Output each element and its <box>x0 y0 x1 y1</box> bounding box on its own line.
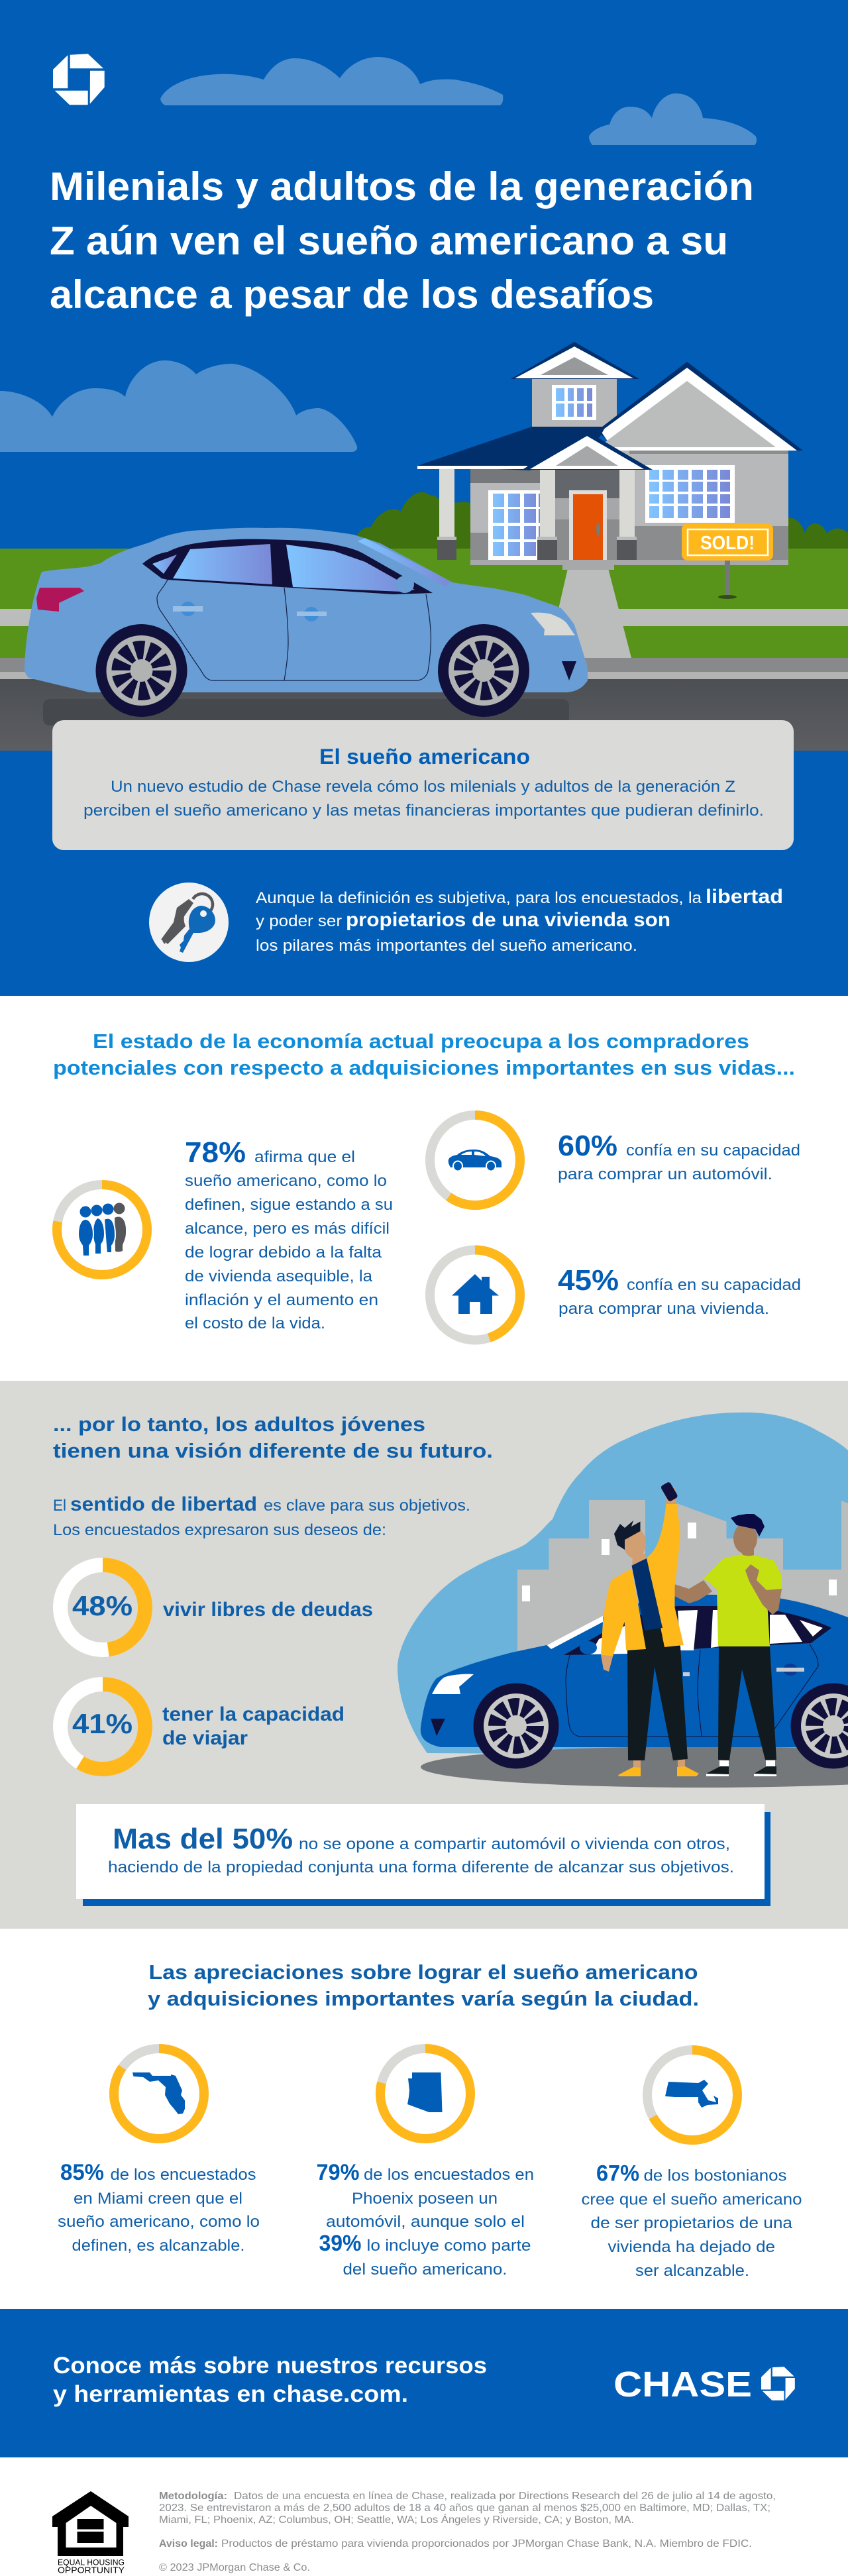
text: Miami: sueño americano, como lo <box>58 2213 260 2231</box>
stat: 60%: 60% <box>558 1130 617 1162</box>
icon: Arizona <box>407 2072 443 2112</box>
ring: 41% <box>60 1684 145 1769</box>
person: friend in lime shirt <box>674 1514 782 1776</box>
stat: 45%: confía en su capacidad <box>627 1276 801 1294</box>
door lines <box>566 1644 818 1737</box>
stat: 78%: afirma que el <box>254 1148 355 1166</box>
taillight <box>36 588 84 612</box>
door handles <box>683 1664 804 1676</box>
stat: 78%: 78% <box>185 1136 246 1169</box>
callout text <box>108 1835 734 1876</box>
cloud: top right <box>589 93 757 145</box>
cta text <box>53 2353 487 2407</box>
cloud: top middle <box>160 57 503 105</box>
text: copyright: © 2023 JPMorgan Chase & Co. <box>159 2562 310 2573</box>
stat: 78%: de lograr debido a la falta <box>185 1244 382 1261</box>
main roof <box>417 427 606 470</box>
ring: 45% <box>430 1250 520 1340</box>
bumper vent <box>562 661 576 680</box>
callout text: no se opone a compartir automóvil o vivienda con otros, <box>299 1835 730 1853</box>
cta text: Conoce más sobre nuestros recursos <box>53 2353 487 2379</box>
icon: Chase logo <box>53 54 105 105</box>
car window frame <box>142 539 433 594</box>
text: Boston: ser alcanzable. <box>635 2262 749 2280</box>
heading: Las apreciaciones sobre lograr el sueño americano <box>148 1960 698 1984</box>
stat: 78%: alcance, pero es más difícil <box>185 1220 390 1238</box>
title: Milenials y adultos de la generación <box>50 164 754 209</box>
ground <box>421 1746 848 1788</box>
ring: Phoenix 79% <box>380 2049 470 2139</box>
headlight <box>432 1674 474 1694</box>
text: freedom and ownership: Aunque la definición es subjetiva, para los encuestados, la <box>256 889 702 907</box>
front wheel <box>438 624 529 717</box>
main gable <box>596 362 803 451</box>
text: Boston <box>582 2161 802 2280</box>
text: methodology: Datos de una encuesta en línea de Chase, realizada por Directions Research del 26 de julio al 14 de agosto, <box>234 2491 776 2502</box>
icon: Massachusetts <box>665 2080 718 2108</box>
city buildings <box>517 1500 848 1653</box>
bumper vent <box>431 1719 445 1736</box>
panel: economy <box>0 996 848 1381</box>
text: Miami <box>58 2160 260 2255</box>
text: legal notice: Productos de préstamo para vivienda proporcionados por JPMorgan Chase Bank, N.A. Miembro de FDIC. <box>221 2538 752 2549</box>
panel: footer <box>0 2457 848 2576</box>
text: freedom and ownership: libertad <box>706 886 783 908</box>
text: Boston: cree que el sueño americano <box>582 2190 802 2209</box>
door <box>569 490 607 560</box>
text: Miami: de los encuestados <box>110 2166 256 2184</box>
text: Boston: vivienda ha dejado de <box>608 2238 775 2256</box>
label: vivir libres de deudas: vivir libres de deudas <box>163 1599 373 1621</box>
stat: 60%: para comprar un automóvil. <box>558 1165 772 1183</box>
callout stat: Mas del 50% <box>113 1823 293 1855</box>
background blob <box>398 1413 848 1756</box>
windshield <box>358 538 450 586</box>
text: Boston: de los bostonianos <box>644 2167 787 2185</box>
icon: equal housing opportunity <box>52 2491 129 2575</box>
text: Miami: definen, es alcanzable. <box>72 2237 245 2255</box>
heading <box>148 1960 699 2010</box>
car mirror <box>580 1641 597 1654</box>
scene: road <box>0 658 848 751</box>
icon: people <box>78 1203 126 1256</box>
text: Phoenix: del sueño americano. <box>343 2261 507 2279</box>
headlight <box>531 613 575 635</box>
stat: 48%: 48% <box>72 1590 132 1621</box>
heading: tienen una visión diferente de su futuro. <box>53 1439 493 1462</box>
card heading: El sueño americano <box>319 745 530 769</box>
text: Miami: en Miami creen que el <box>74 2190 242 2208</box>
car body <box>25 528 588 692</box>
illustration: light blue car <box>25 528 588 725</box>
left window <box>488 490 541 560</box>
stat: 78%: el costo de la vida. <box>185 1315 325 1332</box>
intro text: El <box>53 1497 66 1515</box>
right window <box>645 465 735 523</box>
intro text: es clave para sus objetivos. <box>264 1497 470 1515</box>
car windows <box>152 544 415 592</box>
car shadow <box>43 699 569 725</box>
scene: sidewalk <box>0 609 848 626</box>
stat: 60%: confía en su capacidad <box>626 1142 800 1159</box>
text: methodology: Miami, FL; Phoenix, AZ; Columbus, OH; Seattle, WA; Los Ángeles y Riverside, CA; y Boston, MA. <box>159 2514 634 2526</box>
card body <box>83 778 764 820</box>
ring: 78% <box>57 1185 147 1275</box>
stat: 45%: para comprar una vivienda. <box>558 1300 769 1318</box>
stat: 78% <box>185 1136 393 1332</box>
person: friend with keys <box>601 1481 699 1776</box>
heading: potenciales con respecto a adquisiciones importantes en sus vidas... <box>53 1056 795 1079</box>
text: Boston: de ser propietarios de una <box>591 2214 793 2232</box>
ring: Boston 67% <box>647 2050 737 2140</box>
stat: 45%: 45% <box>558 1264 619 1297</box>
icon: equal housing opportunity: EQUAL HOUSING <box>58 2559 125 2567</box>
car window frame <box>564 1606 831 1655</box>
text: Miami: 85% <box>60 2160 104 2185</box>
ring: 48% <box>60 1565 145 1650</box>
door lines <box>157 580 431 680</box>
ring: Miami 85% <box>114 2049 204 2139</box>
chase wordmark: CHASE <box>613 2365 752 2404</box>
porch floor and step <box>470 560 788 570</box>
callout: shared ownership <box>76 1804 770 1906</box>
icon: house <box>452 1274 499 1314</box>
scene: bushes <box>351 492 848 553</box>
heading <box>53 1413 493 1462</box>
heading <box>53 1030 795 1079</box>
intro text: Los encuestados expresaron sus deseos de: <box>53 1521 386 1539</box>
text: Phoenix: 39% <box>319 2231 362 2256</box>
text: freedom and ownership: propietarios de una vivienda son <box>346 909 670 931</box>
panel: el sueño americano <box>52 720 794 850</box>
panel: different vision <box>0 1381 848 1929</box>
front wheel <box>473 1683 559 1769</box>
porch columns <box>437 469 637 560</box>
rear wheel <box>791 1683 848 1769</box>
text: methodology <box>159 2491 776 2526</box>
panel: hero <box>0 0 848 996</box>
ring: 60% <box>430 1115 520 1205</box>
illustration: house <box>417 342 803 570</box>
stat: 78%: inflación y el aumento en <box>185 1291 378 1309</box>
sold sign: SOLD! <box>700 533 755 554</box>
text: freedom and ownership: y poder ser <box>256 912 342 930</box>
scene: front walk <box>547 568 631 658</box>
stat: 78%: sueño americano, como lo <box>185 1172 387 1190</box>
panel: cities <box>0 1929 848 2310</box>
scene: lawn <box>0 549 848 658</box>
card body: perciben el sueño americano y las metas financieras importantes que pudieran definirlo. <box>83 802 764 820</box>
icon: keys <box>149 883 229 962</box>
text: methodology: Metodología: <box>159 2491 227 2502</box>
stat: 45% <box>558 1264 801 1318</box>
door handles <box>173 602 327 621</box>
heading: El estado de la economía actual preocupa a los compradores <box>93 1030 749 1053</box>
stat: 78%: de vivienda asequible, la <box>185 1267 373 1285</box>
text: freedom and ownership <box>256 886 783 955</box>
icon: Chase logo small <box>761 2367 795 2400</box>
text: Phoenix: automóvil, aunque solo el <box>326 2213 525 2231</box>
car mirror <box>396 576 414 593</box>
cta text: y herramientas en chase.com. <box>53 2381 408 2407</box>
porch gable <box>522 431 653 470</box>
stat: 41%: 41% <box>72 1708 132 1739</box>
dormer <box>511 342 639 428</box>
text: Phoenix: Phoenix poseen un <box>352 2190 498 2208</box>
house wall <box>470 451 788 560</box>
title: Z aún ven el sueño americano a su <box>50 219 728 263</box>
rear wheel <box>95 624 187 717</box>
title: alcance a pesar de los desafíos <box>50 272 654 317</box>
text: Phoenix: de los encuestados en <box>364 2166 534 2184</box>
sold sign <box>682 523 773 599</box>
text: legal notice: Aviso legal: <box>159 2538 218 2549</box>
intro text: sentido de libertad <box>70 1493 257 1515</box>
icon: car <box>449 1150 502 1171</box>
panel: call to action <box>0 2309 848 2457</box>
stat: 78%: definen, sigue estando a su <box>185 1196 393 1214</box>
car windows <box>547 1610 823 1654</box>
heading: ... por lo tanto, los adultos jóvenes <box>53 1413 425 1436</box>
text: freedom and ownership: los pilares más importantes del sueño americano. <box>256 937 637 955</box>
stat: 60% <box>558 1130 800 1183</box>
car body <box>421 1595 848 1747</box>
icon: equal housing opportunity: OPPORTUNITY <box>58 2565 125 2575</box>
text: Phoenix <box>317 2160 534 2279</box>
text: Phoenix: 79% <box>317 2160 359 2185</box>
text: methodology: 2023. Se entrevistaron a más de 2,500 adultos de 18 a 40 años que ganan al menos $25,000 en Baltimore, MD; Dallas, TX; <box>159 2502 770 2514</box>
label: tener la capacidad de viajar <box>162 1703 344 1749</box>
icon: Florida <box>132 2072 185 2114</box>
label: tener la capacidad de viajar: tener la capacidad <box>162 1703 344 1725</box>
intro text <box>53 1493 470 1539</box>
cloud: left <box>0 360 357 452</box>
illustration: two friends and car <box>398 1413 848 1788</box>
heading: y adquisiciones importantes varía según la ciudad. <box>148 1987 699 2010</box>
callout text: haciendo de la propiedad conjunta una forma diferente de alcanzar sus objetivos. <box>108 1858 734 1876</box>
card body: Un nuevo estudio de Chase revela cómo los milenials y adultos de la generación Z <box>111 778 735 796</box>
label: tener la capacidad de viajar: de viajar <box>162 1727 248 1749</box>
text: Phoenix: lo incluye como parte <box>367 2237 531 2255</box>
text: Boston: 67% <box>596 2161 639 2186</box>
title <box>50 164 754 317</box>
